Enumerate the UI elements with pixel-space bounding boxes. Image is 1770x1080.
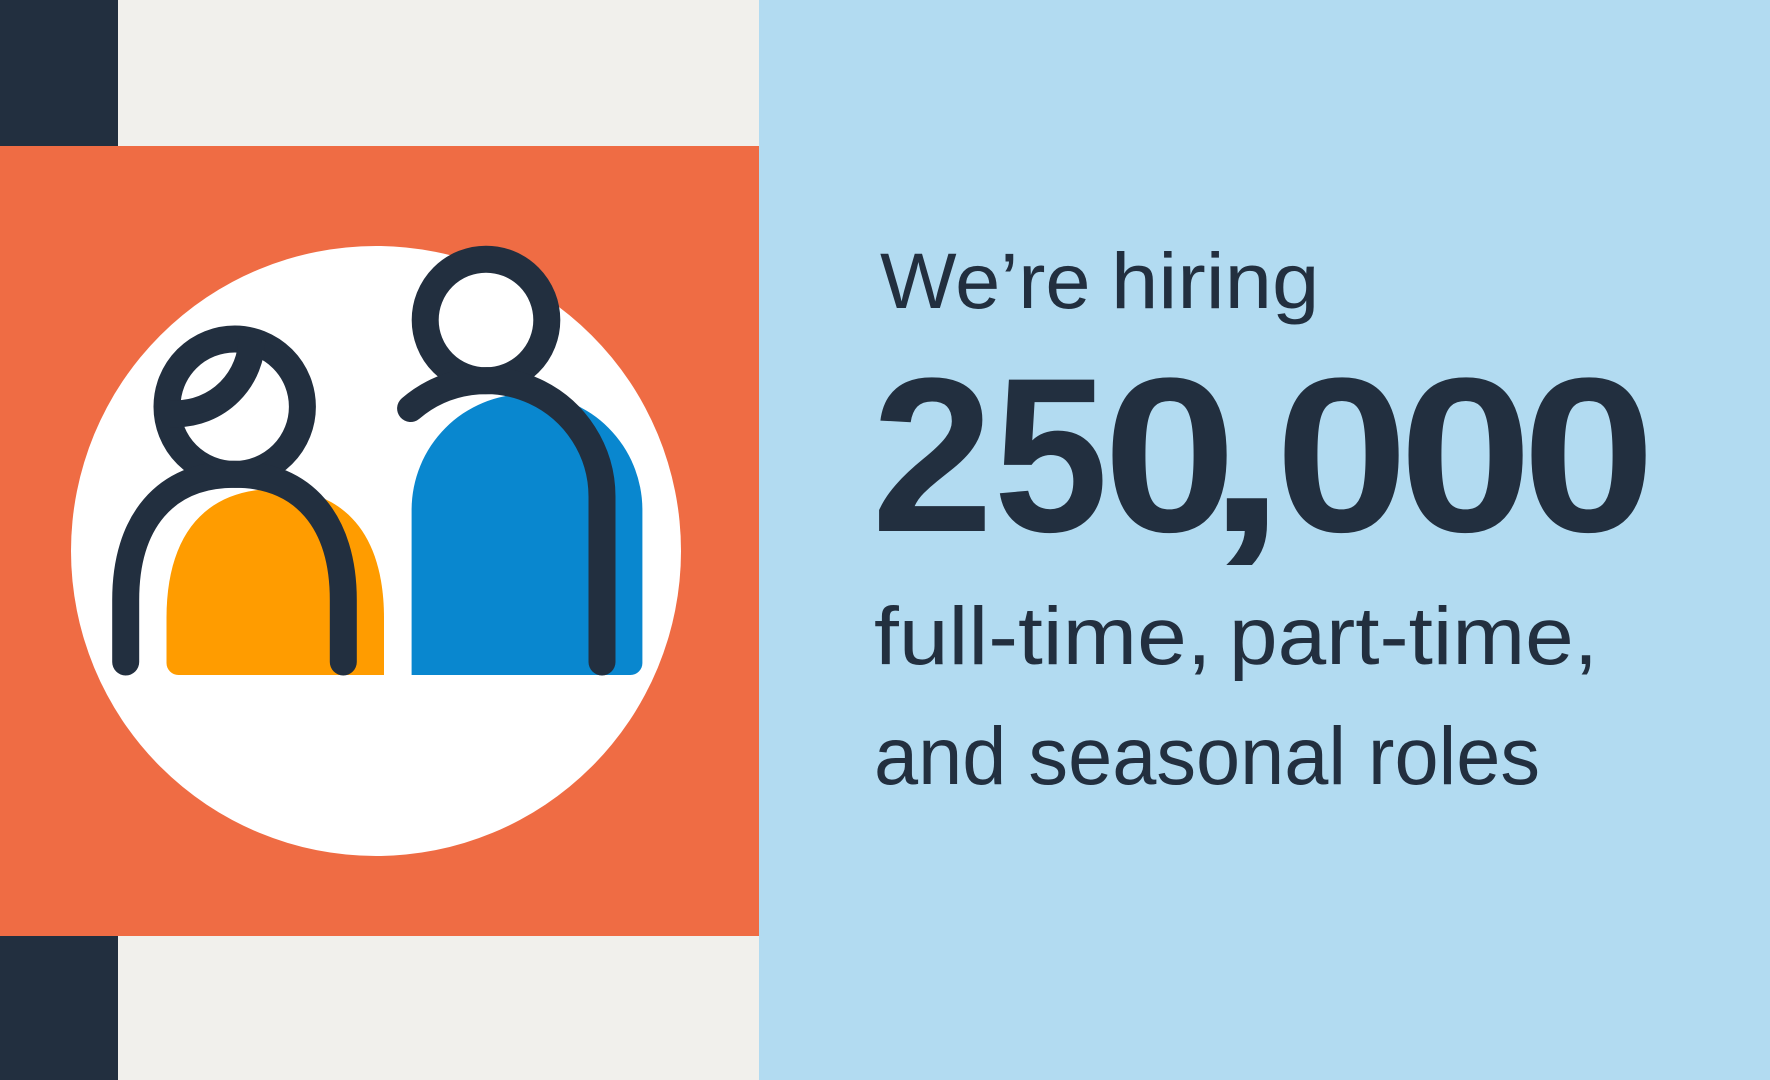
text: full-time, part-time,: part-time, bbox=[1229, 591, 1598, 682]
big number: 250,000: 2 bbox=[872, 332, 994, 578]
panel: cream background with navy corner blocks bbox=[0, 0, 759, 1080]
text block: hiring message bbox=[872, 236, 1656, 802]
woman figure outline bbox=[126, 338, 343, 662]
amber body fill bbox=[166, 489, 384, 675]
panel: light blue text background bbox=[759, 0, 1770, 1080]
big number: 250,000: 0 bbox=[1275, 332, 1408, 578]
blue body fill bbox=[412, 394, 642, 675]
big number: 250,000: 0 bbox=[1522, 332, 1656, 578]
heading: We're hiring: We’re bbox=[880, 236, 1090, 325]
big number: 250,000: 5 bbox=[994, 332, 1108, 578]
man figure outline bbox=[411, 259, 602, 662]
icon: two people in white circle bbox=[71, 246, 681, 856]
big number: 250,000: , bbox=[1207, 332, 1286, 578]
text: full-time, part-time,: full-time, bbox=[874, 591, 1212, 682]
big number: 250,000: 0 bbox=[1399, 332, 1532, 578]
text: and seasonal roles: and seasonal roles bbox=[874, 711, 1540, 802]
heading: We're hiring: hiring bbox=[1111, 236, 1319, 325]
panel: orange illustration background bbox=[0, 146, 759, 936]
white circle bbox=[71, 246, 681, 856]
big number: 250,000: 0 bbox=[1103, 332, 1236, 578]
